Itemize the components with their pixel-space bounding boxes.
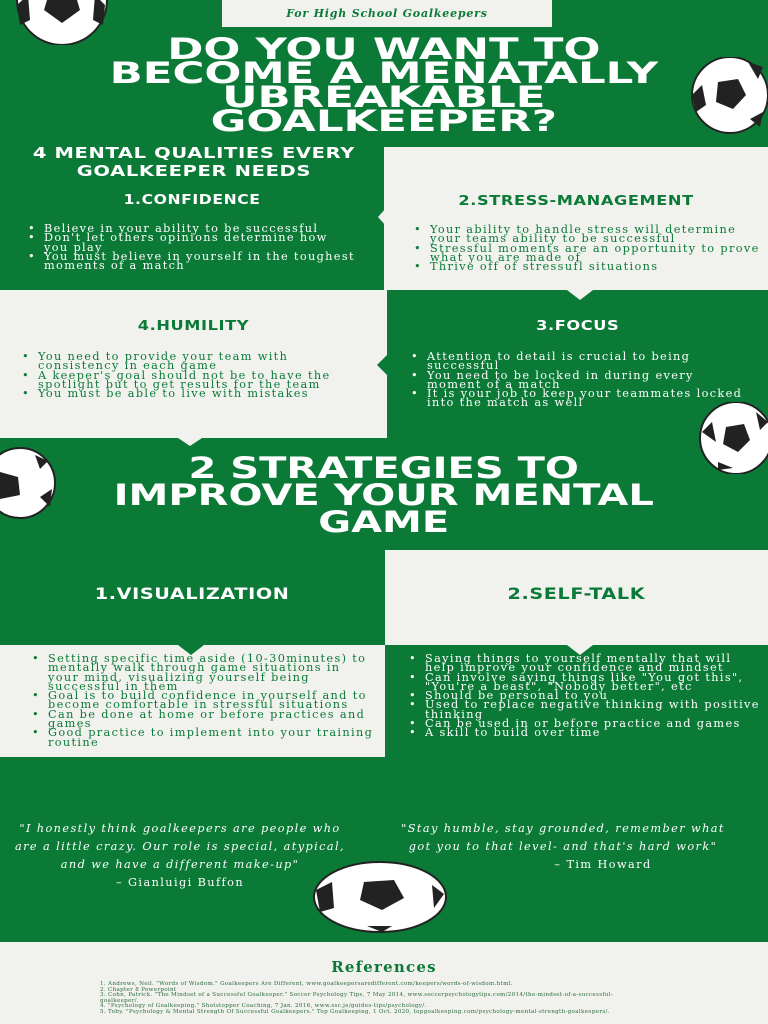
panel: references: 2. Chapter 8 Powerpoint [100, 986, 176, 992]
quote: Howard [401, 822, 725, 871]
panel: self-talk text: Can involve saying things like "You got this", "You're a beast", "Nobody better", etc [425, 671, 744, 693]
top label: For High School Goalkeepers [286, 7, 488, 20]
panel: self-talk text: Used to replace negative thinking with positive thinking [425, 698, 760, 721]
quote: Buffon [15, 822, 345, 889]
panel: humility: 4.HUMILITY [138, 318, 249, 334]
panel: self-talk heading [385, 550, 768, 645]
heading: 2 strategies: GAME [318, 505, 449, 539]
icon: ball top-left [16, 0, 108, 45]
title: GOALKEEPER? [211, 104, 557, 138]
panel: focus: Attention to detail is crucial to being successful [427, 350, 690, 372]
panel: references: 5. Toby. "Psychology & Mental Strength Of Successful Goalkeepers." Top Goalkeeping, 1 Oct. 2020, topgoalkeeping.com/psychology-mental-strength-goalkeepers/. [100, 1008, 610, 1014]
quote: Buffon: – Gianluigi Buffon [116, 876, 244, 889]
panel: self-talk heading: 2.SELF-TALK [508, 584, 645, 603]
panel: focus: You need to be locked in during every moment of a match [427, 369, 694, 391]
panel: visualization text: Can be done at home or before practices and games [48, 708, 365, 730]
panel: self-talk text: Can be used in or before practice and games [425, 717, 741, 730]
icon: ball left middle [0, 447, 56, 519]
panel: confidence: Believe in your ability to be successful [44, 222, 318, 235]
panel: stress management: Thrive off of stressufl situations [430, 260, 658, 273]
panel: humility: You must be able to live with mistakes [38, 387, 309, 400]
panel: self-talk text: Saying things to yourself mentally that will help improve your confidence and mindset [425, 652, 731, 674]
quote: Howard: – Tim Howard [554, 858, 652, 871]
top label [222, 0, 552, 27]
arrow: focus pointing left [377, 355, 387, 375]
panel: focus: It is your job to keep your teammates locked into the match as well [427, 387, 742, 409]
panel: visualization text: Good practice to implement into your training routine [48, 726, 373, 749]
panel: focus [387, 290, 768, 438]
subtitle: 4 mental qualities [32, 144, 355, 180]
arrow: self-talk down [567, 645, 593, 655]
panel: references: 1. Andrews, Neil. "Words of Wisdom." Goalkeepers Are Different, www.goalkeepersaredifferent.com/keepers/words-of-wisdom.html. [100, 981, 513, 987]
icon: ball bottom [313, 861, 447, 933]
panel: visualization text: Setting specific time aside (10-30minutes) to mentally walk through game situations in your mind, visualizing yourself being successful in them [48, 652, 366, 693]
panel: self-talk text: A skill to build over time [425, 726, 601, 739]
panel: confidence: 1.CONFIDENCE [124, 193, 260, 208]
panel: stress management: Your ability to handle stress will determine your teams ability to be successful [430, 223, 736, 245]
panel: confidence: You must believe in yourself in the toughest moments of a match [44, 250, 355, 272]
panel: stress management: Stressful moments are an opportunity to prove what you are made of [430, 242, 760, 264]
quote: Howard: "Stay humble, stay grounded, remember what [401, 822, 725, 835]
quote: Buffon: are a little crazy. Our role is special, atypical, [15, 840, 345, 853]
panel: visualization text [0, 645, 385, 757]
panel: humility [0, 290, 387, 438]
quote: Buffon: and we have a different make-up" [61, 858, 299, 871]
title: BECOME A MENATALLY [110, 56, 658, 90]
panel: visualization heading: 1.VISUALIZATION [95, 584, 290, 603]
panel: confidence [0, 185, 384, 290]
panel: visualization heading [0, 550, 385, 645]
icon: ball right [691, 57, 768, 134]
arrow: down into focus [567, 290, 593, 300]
panel: humility: A keeper's goal should not be to have the spotlight but to get results for the team [38, 369, 331, 391]
panel: self-talk text [385, 645, 768, 757]
subtitle: 4 mental qualities: GOALKEEPER NEEDS [76, 162, 311, 180]
panel: humility: You need to provide your team with consistency in each game [38, 350, 288, 372]
panel: visualization text: Goal is to build confidence in yourself and to become comfortable in stressful situations [48, 689, 367, 711]
arrow: visualization down [178, 645, 204, 655]
panel: references: References [331, 958, 437, 976]
title: UBREAKABLE [222, 80, 546, 114]
panel: self-talk text: Should be personal to you [425, 689, 608, 702]
panel: confidence: Don't let others opinions determine how you play [44, 231, 328, 254]
arrow: stress panel pointing left [378, 208, 386, 226]
panel: references [0, 942, 768, 1024]
panel: stress management [384, 147, 768, 290]
subtitle: 4 mental qualities: 4 MENTAL QUALITIES EVERY [32, 144, 355, 162]
panel: references: 4. "Psychology of Goalkeeping." Shotstopper Coaching, 7 Jan. 2016, www.ssc.je/guides-tips/psychology/. [100, 1003, 426, 1009]
heading: 2 strategies: IMPROVE YOUR MENTAL [114, 478, 654, 512]
panel: focus: 3.FOCUS [536, 318, 619, 334]
icon: ball right middle [699, 402, 768, 474]
arrow: humility down [178, 438, 202, 446]
heading: 2 strategies [114, 451, 654, 539]
panel: references: 3. Cohn, Patrick. "The Mindset of a Successful Goalkeeper." Soccer Psychology Tips, 7 May 2014, www.soccerpsychologytips.com/2014/the-mindset-of-a-successful-goalkeeper/. [100, 992, 613, 1004]
title [110, 32, 658, 138]
heading: 2 strategies: 2 STRATEGIES TO [189, 451, 579, 485]
panel: stress management: 2.STRESS-MANAGEMENT [458, 193, 694, 209]
title: DO YOU WANT TO [167, 32, 601, 66]
quote: Howard: got you to that level- and that's hard work" [409, 840, 717, 853]
quote: Buffon: "I honestly think goalkeepers are people who [19, 822, 341, 835]
